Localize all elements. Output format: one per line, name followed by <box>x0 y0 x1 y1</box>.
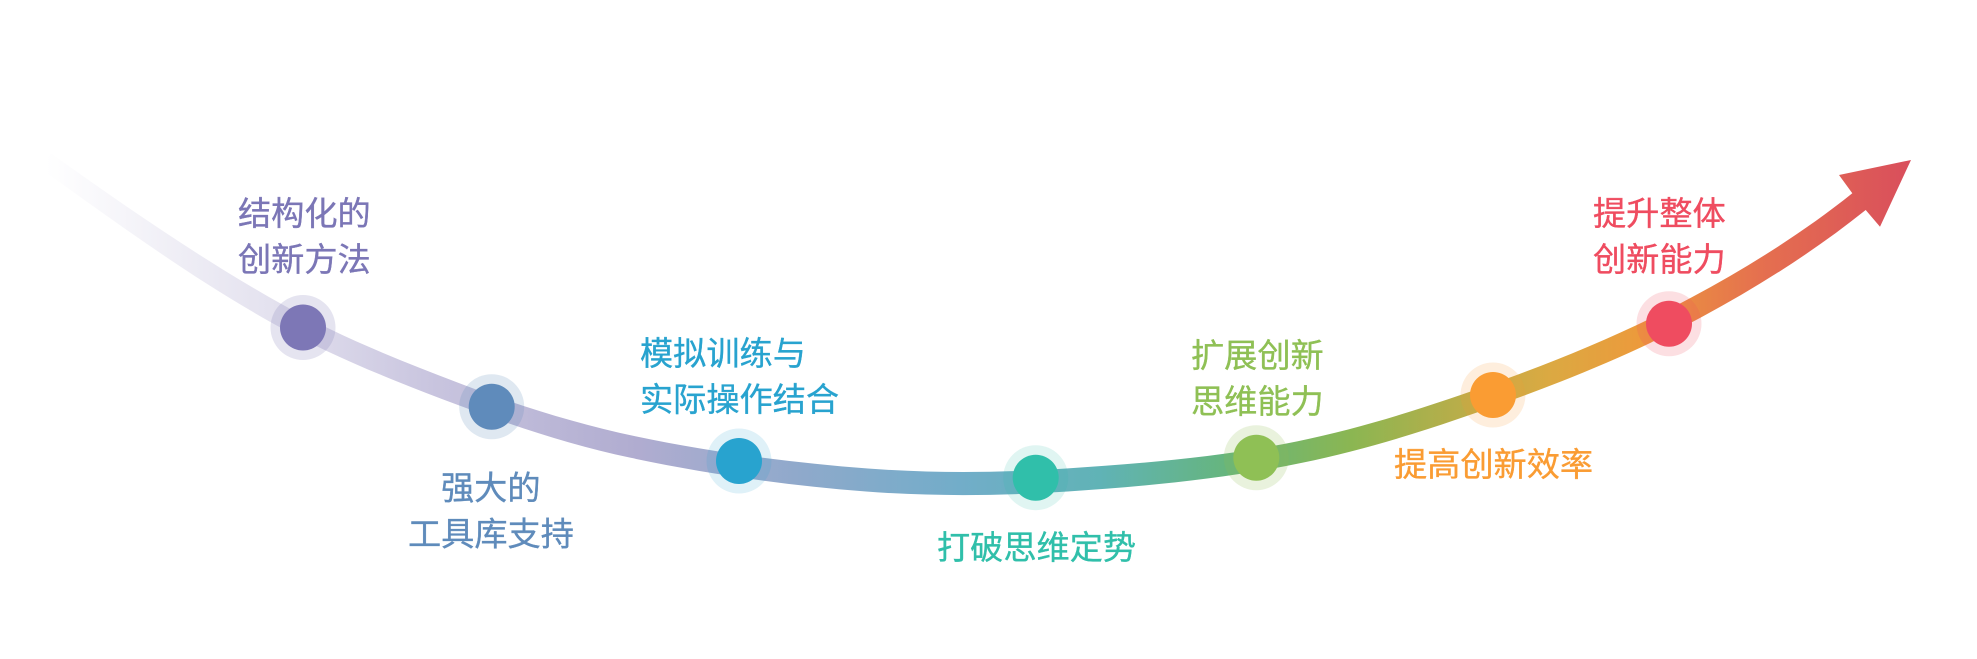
node 1: structured methods: 创新方法 <box>238 242 371 279</box>
node 3: simulation and practice: 实际操作结合 <box>640 382 839 419</box>
node 1: structured methods <box>238 196 371 360</box>
node 1: structured methods: 结构化的 <box>238 196 371 233</box>
node 5: expanding innovative thinking <box>1191 338 1324 490</box>
node 7: overall capability <box>1593 196 1726 356</box>
curved arrow <box>40 153 1911 495</box>
node 6: improving efficiency <box>1394 362 1593 484</box>
node 5: expanding innovative thinking: 思维能力 <box>1191 384 1324 421</box>
node 2: tool library: 强大的 <box>441 470 541 508</box>
node 7: overall capability: 提升整体 <box>1593 196 1726 233</box>
node 3: simulation and practice: 模拟训练与 <box>640 336 806 373</box>
node 4: breaking mental sets <box>937 445 1136 567</box>
node 6: improving efficiency: 提高创新效率 <box>1394 447 1593 484</box>
node 2: tool library: 工具库支持 <box>408 516 574 554</box>
node 5: expanding innovative thinking: 扩展创新 <box>1191 338 1324 375</box>
node 3: simulation and practice <box>640 336 839 494</box>
node 2: tool library <box>408 374 574 554</box>
node 4: breaking mental sets: 打破思维定势 <box>937 530 1136 567</box>
node 7: overall capability: 创新能力 <box>1593 242 1726 279</box>
